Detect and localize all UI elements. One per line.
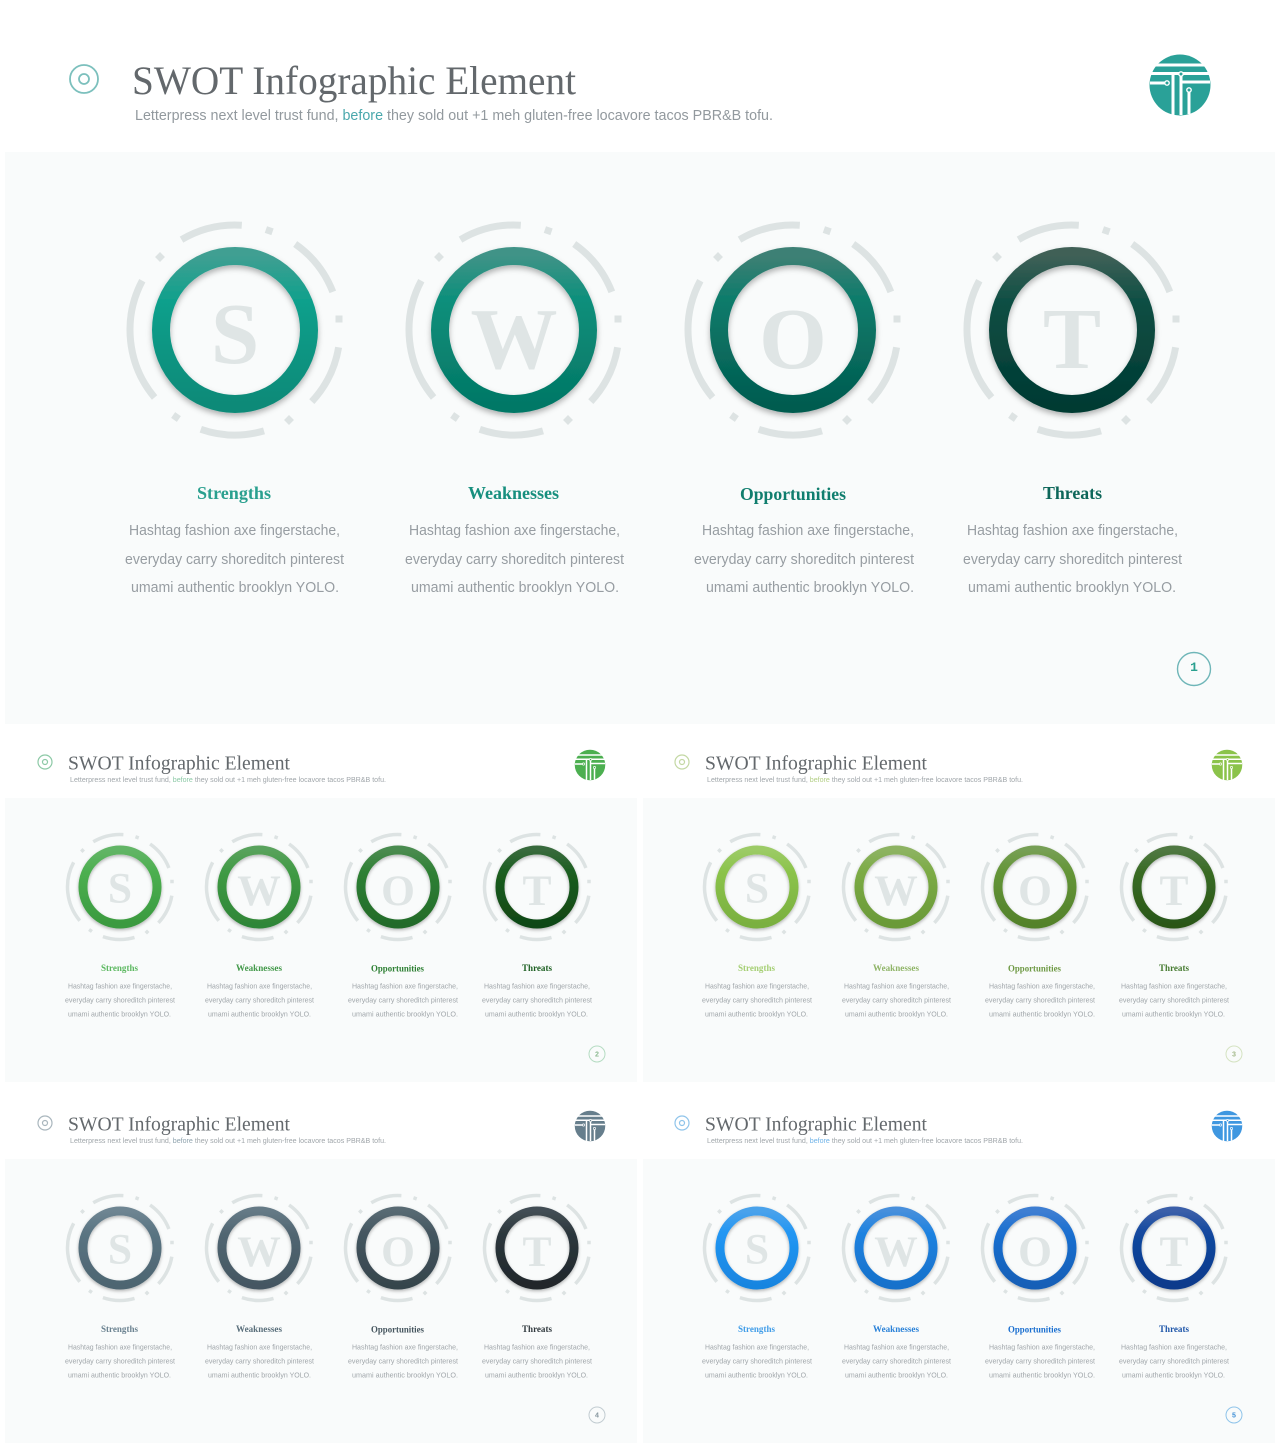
Threats text: Threats bbox=[522, 963, 552, 973]
title: SWOT Infographic Element bbox=[132, 58, 576, 103]
Weaknesses text: Hashtag fashion axe fingerstache, bbox=[844, 1342, 949, 1352]
Strengths text: everyday carry shoreditch pinterest bbox=[125, 552, 344, 568]
Opportunities text: Hashtag fashion axe fingerstache, bbox=[989, 1342, 1095, 1352]
Strengths text: umami authentic brooklyn YOLO. bbox=[68, 1010, 171, 1018]
Threats text: everyday carry shoreditch pinterest bbox=[482, 996, 592, 1004]
Threats text: Hashtag fashion axe fingerstache, bbox=[1121, 1342, 1227, 1352]
header: icon, title and subtitle bbox=[38, 752, 386, 784]
Threats text: Hashtag fashion axe fingerstache, bbox=[484, 982, 590, 990]
Threats text: Hashtag fashion axe fingerstache, bbox=[484, 1342, 590, 1352]
Strengths text bbox=[65, 1324, 175, 1380]
Strengths text: everyday carry shoreditch pinterest bbox=[65, 1356, 175, 1366]
Threats text bbox=[482, 963, 592, 1018]
T ring: T bbox=[522, 867, 552, 915]
logo bbox=[575, 1111, 605, 1141]
Threats text: everyday carry shoreditch pinterest bbox=[1119, 996, 1229, 1004]
header: icon, title and subtitle bbox=[675, 752, 1023, 784]
W ring: W bbox=[470, 290, 558, 387]
Opportunities text: Hashtag fashion axe fingerstache, bbox=[352, 982, 458, 990]
Opportunities text: umami authentic brooklyn YOLO. bbox=[352, 1010, 458, 1018]
title: SWOT Infographic Element bbox=[705, 1114, 927, 1136]
Opportunities text: umami authentic brooklyn YOLO. bbox=[706, 580, 914, 596]
Opportunities text: Hashtag fashion axe fingerstache, bbox=[352, 1342, 458, 1352]
Opportunities text bbox=[985, 964, 1095, 1018]
page number badge: 5 bbox=[1232, 1412, 1236, 1420]
panel: main SWOT slide (teal) bbox=[5, 54, 1275, 724]
Threats text: Threats bbox=[1043, 483, 1102, 503]
page number badge: 4 bbox=[595, 1412, 599, 1420]
subtitle: Letterpress next level trust fund, before they sold out +1 meh gluten-free locavore tacos PBR&B tofu. bbox=[135, 108, 773, 124]
header: icon, title and subtitle bbox=[675, 1114, 1023, 1145]
Strengths text: Strengths bbox=[101, 963, 138, 973]
Strengths text: Hashtag fashion axe fingerstache, bbox=[705, 1342, 809, 1352]
S ring: S bbox=[745, 1226, 769, 1274]
O ring: O bbox=[381, 1228, 415, 1276]
subtitle: Letterpress next level trust fund, before they sold out +1 meh gluten-free locavore tacos PBR&B tofu. bbox=[70, 1138, 386, 1145]
page number badge bbox=[589, 1046, 605, 1062]
Opportunities text: umami authentic brooklyn YOLO. bbox=[989, 1010, 1095, 1018]
page number badge bbox=[1226, 1046, 1242, 1062]
Opportunities text: Opportunities bbox=[1008, 964, 1061, 974]
O ring bbox=[688, 225, 900, 435]
Weaknesses text: Hashtag fashion axe fingerstache, bbox=[207, 1342, 312, 1352]
Weaknesses text: umami authentic brooklyn YOLO. bbox=[208, 1010, 311, 1018]
title: SWOT Infographic Element bbox=[705, 752, 927, 774]
page number badge bbox=[1226, 1407, 1242, 1423]
W ring bbox=[207, 834, 313, 940]
page number badge bbox=[589, 1407, 605, 1423]
Threats text: umami authentic brooklyn YOLO. bbox=[485, 1010, 588, 1018]
Weaknesses text: umami authentic brooklyn YOLO. bbox=[845, 1370, 948, 1380]
O ring: O bbox=[1018, 867, 1052, 915]
W ring: W bbox=[237, 1228, 281, 1276]
W ring: W bbox=[874, 1228, 918, 1276]
Weaknesses text bbox=[842, 963, 951, 1018]
W ring: W bbox=[874, 867, 918, 915]
Opportunities text bbox=[694, 484, 914, 596]
panel: SWOT slide 3 (light green) bbox=[643, 750, 1275, 1082]
Strengths text bbox=[65, 963, 175, 1018]
O ring: O bbox=[381, 867, 415, 915]
Strengths text: umami authentic brooklyn YOLO. bbox=[705, 1370, 808, 1380]
Weaknesses text: umami authentic brooklyn YOLO. bbox=[411, 580, 619, 596]
Weaknesses text bbox=[205, 963, 314, 1018]
Opportunities text: Opportunities bbox=[1008, 1324, 1061, 1334]
Opportunities text: Opportunities bbox=[740, 484, 846, 504]
Weaknesses text bbox=[842, 1324, 951, 1380]
S ring: S bbox=[211, 285, 259, 382]
Opportunities text: umami authentic brooklyn YOLO. bbox=[989, 1370, 1095, 1380]
T ring: T bbox=[522, 1228, 552, 1276]
panel: SWOT slide 4 (slate) bbox=[5, 1111, 637, 1443]
Strengths text: umami authentic brooklyn YOLO. bbox=[131, 580, 339, 596]
Weaknesses text bbox=[205, 1324, 314, 1380]
Strengths text: Strengths bbox=[738, 1324, 775, 1334]
Strengths text: Strengths bbox=[101, 1324, 138, 1334]
Threats text: umami authentic brooklyn YOLO. bbox=[485, 1370, 588, 1380]
Threats text bbox=[963, 483, 1182, 596]
T ring: T bbox=[1043, 290, 1101, 387]
Weaknesses text: everyday carry shoreditch pinterest bbox=[405, 552, 624, 568]
page number badge: 1 bbox=[1190, 660, 1198, 675]
O ring bbox=[983, 834, 1089, 940]
Strengths text: Hashtag fashion axe fingerstache, bbox=[68, 982, 172, 990]
Opportunities text: Opportunities bbox=[371, 964, 424, 974]
Strengths text: everyday carry shoreditch pinterest bbox=[65, 996, 175, 1004]
W ring bbox=[844, 1195, 950, 1301]
Threats text: everyday carry shoreditch pinterest bbox=[482, 1356, 592, 1366]
Threats text: Threats bbox=[522, 1324, 552, 1334]
S ring bbox=[68, 1195, 174, 1301]
Weaknesses text: everyday carry shoreditch pinterest bbox=[842, 996, 951, 1004]
Strengths text: Strengths bbox=[738, 963, 775, 973]
Weaknesses text: Hashtag fashion axe fingerstache, bbox=[409, 523, 620, 539]
Weaknesses text bbox=[405, 483, 624, 596]
S ring bbox=[705, 1195, 811, 1301]
logo bbox=[1150, 54, 1210, 116]
Strengths text: everyday carry shoreditch pinterest bbox=[702, 996, 812, 1004]
T ring bbox=[485, 834, 591, 940]
panel: SWOT slide 2 (green) bbox=[5, 750, 637, 1082]
W ring bbox=[844, 834, 950, 940]
icon: target bbox=[675, 755, 689, 769]
Opportunities text: everyday carry shoreditch pinterest bbox=[694, 552, 914, 568]
T ring bbox=[1122, 834, 1228, 940]
Opportunities text bbox=[348, 964, 458, 1018]
page number badge: 2 bbox=[595, 1052, 599, 1060]
Threats text: everyday carry shoreditch pinterest bbox=[1119, 1356, 1229, 1366]
Weaknesses text: Weaknesses bbox=[873, 963, 919, 973]
subtitle: Letterpress next level trust fund, before they sold out +1 meh gluten-free locavore tacos PBR&B tofu. bbox=[707, 777, 1023, 784]
title: SWOT Infographic Element bbox=[68, 1114, 290, 1136]
Opportunities text: Hashtag fashion axe fingerstache, bbox=[989, 982, 1095, 990]
Threats text bbox=[1119, 1324, 1229, 1380]
Opportunities text bbox=[985, 1324, 1095, 1380]
Weaknesses text: everyday carry shoreditch pinterest bbox=[205, 1356, 314, 1366]
Opportunities text bbox=[348, 1324, 458, 1380]
subtitle: Letterpress next level trust fund, before they sold out +1 meh gluten-free locavore tacos PBR&B tofu. bbox=[70, 777, 386, 784]
Strengths text bbox=[702, 963, 812, 1018]
header: icon, title and subtitle bbox=[70, 58, 773, 124]
Opportunities text: everyday carry shoreditch pinterest bbox=[348, 1356, 458, 1366]
panel: SWOT slide 5 (blue) bbox=[643, 1111, 1275, 1443]
Weaknesses text: Weaknesses bbox=[236, 1324, 282, 1334]
icon: target bbox=[38, 1116, 52, 1130]
Opportunities text: Opportunities bbox=[371, 1324, 424, 1334]
O ring bbox=[346, 834, 452, 940]
Strengths text bbox=[702, 1324, 812, 1380]
Weaknesses text: everyday carry shoreditch pinterest bbox=[205, 996, 314, 1004]
logo bbox=[1212, 750, 1242, 780]
O ring bbox=[346, 1195, 452, 1301]
Threats text: umami authentic brooklyn YOLO. bbox=[1122, 1010, 1225, 1018]
logo bbox=[575, 750, 605, 780]
Threats text bbox=[482, 1324, 592, 1380]
S ring bbox=[705, 834, 811, 940]
Weaknesses text: Hashtag fashion axe fingerstache, bbox=[207, 982, 312, 990]
icon: target bbox=[38, 755, 52, 769]
Opportunities text: umami authentic brooklyn YOLO. bbox=[352, 1370, 458, 1380]
Weaknesses text: Weaknesses bbox=[468, 483, 559, 503]
W ring: W bbox=[237, 867, 281, 915]
Opportunities text: everyday carry shoreditch pinterest bbox=[348, 996, 458, 1004]
O ring: O bbox=[759, 290, 827, 387]
header: icon, title and subtitle bbox=[38, 1114, 386, 1145]
Threats text: Threats bbox=[1159, 1324, 1189, 1334]
T ring bbox=[1122, 1195, 1228, 1301]
Opportunities text: everyday carry shoreditch pinterest bbox=[985, 996, 1095, 1004]
Strengths text: umami authentic brooklyn YOLO. bbox=[68, 1370, 171, 1380]
page number badge bbox=[1178, 652, 1210, 686]
Strengths text: everyday carry shoreditch pinterest bbox=[702, 1356, 812, 1366]
Threats text: Hashtag fashion axe fingerstache, bbox=[967, 523, 1178, 539]
Weaknesses text: Weaknesses bbox=[873, 1324, 919, 1334]
subtitle: Letterpress next level trust fund, before they sold out +1 meh gluten-free locavore tacos PBR&B tofu. bbox=[707, 1138, 1023, 1145]
Strengths text: Hashtag fashion axe fingerstache, bbox=[705, 982, 809, 990]
title: SWOT Infographic Element bbox=[68, 752, 290, 774]
T ring: T bbox=[1159, 867, 1189, 915]
icon: target bbox=[70, 65, 98, 93]
Strengths text: umami authentic brooklyn YOLO. bbox=[705, 1010, 808, 1018]
Weaknesses text: Weaknesses bbox=[236, 963, 282, 973]
Strengths text: Hashtag fashion axe fingerstache, bbox=[129, 523, 340, 539]
Threats text bbox=[1119, 963, 1229, 1018]
Weaknesses text: everyday carry shoreditch pinterest bbox=[842, 1356, 951, 1366]
logo bbox=[1212, 1111, 1242, 1141]
S ring: S bbox=[108, 1226, 132, 1274]
S ring: S bbox=[108, 864, 132, 912]
Threats text: umami authentic brooklyn YOLO. bbox=[968, 580, 1176, 596]
O ring bbox=[983, 1195, 1089, 1301]
Threats text: umami authentic brooklyn YOLO. bbox=[1122, 1370, 1225, 1380]
Threats text: Threats bbox=[1159, 963, 1189, 973]
Opportunities text: Hashtag fashion axe fingerstache, bbox=[702, 523, 914, 539]
Strengths text: Hashtag fashion axe fingerstache, bbox=[68, 1342, 172, 1352]
page number badge: 3 bbox=[1232, 1052, 1236, 1060]
Weaknesses text: umami authentic brooklyn YOLO. bbox=[208, 1370, 311, 1380]
O ring: O bbox=[1018, 1228, 1052, 1276]
W ring bbox=[409, 225, 622, 435]
Weaknesses text: Hashtag fashion axe fingerstache, bbox=[844, 982, 949, 990]
Threats text: Hashtag fashion axe fingerstache, bbox=[1121, 982, 1227, 990]
Weaknesses text: umami authentic brooklyn YOLO. bbox=[845, 1010, 948, 1018]
Opportunities text: everyday carry shoreditch pinterest bbox=[985, 1356, 1095, 1366]
T ring bbox=[967, 225, 1180, 435]
Strengths text: Strengths bbox=[197, 483, 271, 503]
S ring bbox=[68, 834, 174, 940]
Threats text: everyday carry shoreditch pinterest bbox=[963, 552, 1182, 568]
S ring: S bbox=[745, 864, 769, 912]
T ring bbox=[485, 1195, 591, 1301]
Strengths text bbox=[125, 483, 344, 596]
W ring bbox=[207, 1195, 313, 1301]
icon: target bbox=[675, 1116, 689, 1130]
S ring bbox=[130, 225, 342, 435]
T ring: T bbox=[1159, 1228, 1189, 1276]
